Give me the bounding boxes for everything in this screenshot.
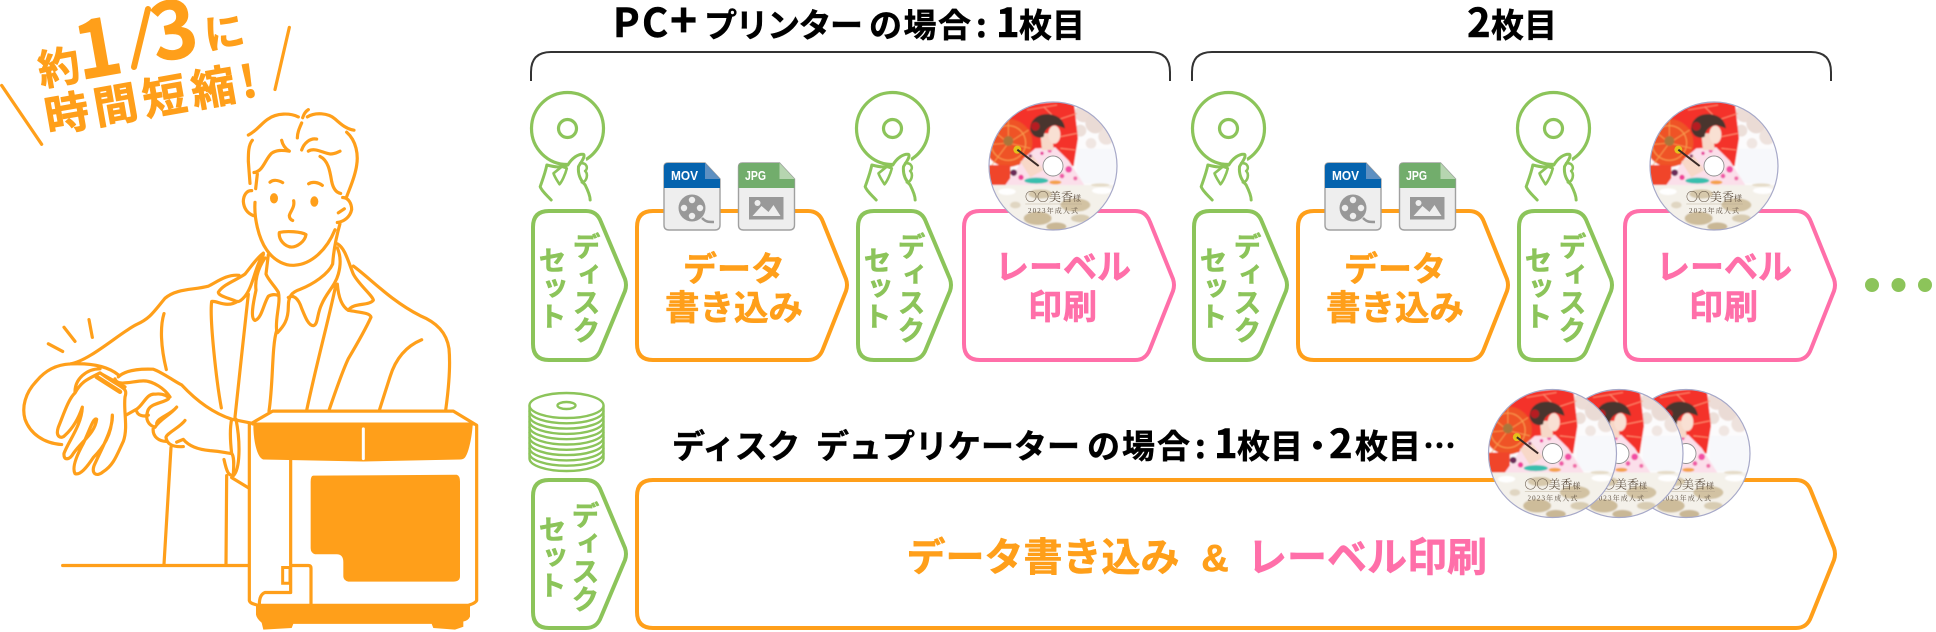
icon: JPG file: JPG	[745, 168, 766, 183]
burst line right	[275, 27, 289, 89]
heading: disc duplicator: ディスク	[672, 420, 800, 468]
burst line left	[2, 85, 42, 144]
heading: disc duplicator: ・	[1301, 420, 1334, 468]
motion ticks by watch	[48, 320, 92, 351]
disc 2	[1550, 386, 1688, 522]
headline: 約1/3に時間短縮!: 時間短縮!	[39, 45, 267, 146]
step: disc set: セット	[860, 246, 892, 330]
printed disc: 〇〇美香様	[1025, 190, 1081, 204]
step: data writing: データ	[1344, 250, 1446, 289]
step: label printing: レーベル	[995, 249, 1131, 287]
ellipsis dots: continues	[1865, 278, 1932, 292]
step: disc set: ディスク	[1230, 232, 1262, 344]
printed disc: 〇〇美香様	[1686, 190, 1742, 204]
step: disc set	[858, 211, 951, 360]
step: disc set (duplicator)	[533, 480, 626, 628]
icon: JPG file	[1400, 163, 1456, 230]
heading: disc duplicator: の場合	[1087, 420, 1192, 468]
step: disc set: ディスク	[570, 232, 600, 344]
heading: disc duplicator: 1	[1214, 412, 1238, 470]
disc 3	[1617, 386, 1755, 522]
step: data writing	[1298, 211, 1508, 360]
disc 3: 〇〇美香様	[1658, 478, 1714, 492]
heading: disc duplicator: …	[1423, 420, 1456, 468]
watch band	[97, 377, 120, 392]
disc 1: 〇〇美香様	[1524, 478, 1581, 492]
heading: disc duplicator: 枚目	[1355, 420, 1421, 468]
bracket: first disc	[531, 52, 1170, 81]
step: data writing and label printing: データ書き込み	[906, 536, 1180, 580]
disc 1: 2023年成人式	[1528, 494, 1578, 502]
left eye	[270, 193, 278, 204]
step: data writing: 書き込み	[1326, 290, 1464, 328]
step: data writing and label printing	[637, 480, 1835, 628]
printed discs: three overlapping	[1484, 386, 1755, 522]
icon: JPG file	[738, 163, 794, 230]
headline: 約1/3に時間短縮!	[33, 0, 267, 146]
step: disc set	[533, 211, 626, 360]
headline: 約1/3に時間短縮!: 約	[33, 31, 85, 99]
heading: PC+printer first disc: プリンター	[704, 0, 862, 47]
step: disc set (duplicator): ディスク	[568, 501, 600, 613]
disc 1	[1484, 386, 1621, 522]
step: label printing: 印刷	[1689, 289, 1759, 327]
icon: hand holding disc	[532, 92, 604, 200]
step: data writing and label printing: &	[1201, 538, 1229, 580]
bracket: second disc	[1192, 52, 1831, 81]
icon: disc stack	[530, 393, 604, 471]
step: disc set: セット	[1522, 246, 1552, 330]
printed disc: 2023年成人式	[1689, 206, 1739, 215]
heading: disc duplicator: デュプリケーター	[816, 420, 1080, 468]
heading: disc duplicator: 枚目	[1237, 420, 1303, 468]
heading: PC+printer first disc: 枚目	[1019, 0, 1085, 47]
disc 2: 〇〇美香様	[1591, 478, 1647, 492]
step: data writing	[637, 211, 847, 360]
step: disc set: ディスク	[894, 232, 926, 344]
step: disc set	[1194, 211, 1287, 360]
icon: hand holding disc	[1518, 92, 1590, 200]
flow: first disc	[532, 92, 1174, 360]
icon: MOV file	[664, 163, 720, 230]
icon: hand holding disc	[856, 92, 928, 200]
right eye	[310, 196, 318, 207]
step: label printing	[1625, 211, 1835, 360]
heading: disc duplicator: 2	[1329, 412, 1353, 470]
step: disc set: セット	[1196, 246, 1228, 330]
step: data writing and label printing: レーベル印刷	[1247, 536, 1487, 580]
icon: MOV file	[1325, 163, 1381, 230]
step: disc set	[1519, 211, 1612, 360]
man line drawing	[24, 110, 450, 565]
step: label printing: 印刷	[1028, 289, 1098, 327]
step: disc set: セット	[536, 246, 566, 330]
icon: hand holding disc	[1192, 92, 1264, 200]
step: disc set: ディスク	[1556, 232, 1586, 344]
icon: MOV file: MOV	[1332, 168, 1359, 183]
disc 3: 2023年成人式	[1661, 494, 1711, 502]
disc 2: 2023年成人式	[1594, 494, 1644, 502]
heading: PC+printer first disc: :	[976, 0, 987, 47]
step: disc set (duplicator): セット	[536, 515, 566, 599]
step: label printing	[964, 211, 1174, 360]
printed disc: 2023年成人式	[1028, 206, 1078, 215]
flow: second disc	[1192, 92, 1835, 360]
disc duplicator machine	[249, 411, 477, 630]
heading: disc duplicator: :	[1195, 420, 1206, 468]
heading: second disc: 枚目	[1491, 0, 1557, 47]
step: label printing: レーベル	[1656, 249, 1792, 287]
printed disc	[984, 98, 1122, 235]
printed disc	[1645, 98, 1783, 235]
step: data writing: データ	[683, 250, 785, 289]
heading: PC+printer first disc: の場合	[869, 0, 972, 47]
icon: JPG file: JPG	[1406, 168, 1427, 183]
step: data writing: 書き込み	[665, 290, 803, 328]
illustration: man checking watch beside disc duplicator	[2, 27, 477, 630]
icon: MOV file: MOV	[671, 168, 698, 183]
